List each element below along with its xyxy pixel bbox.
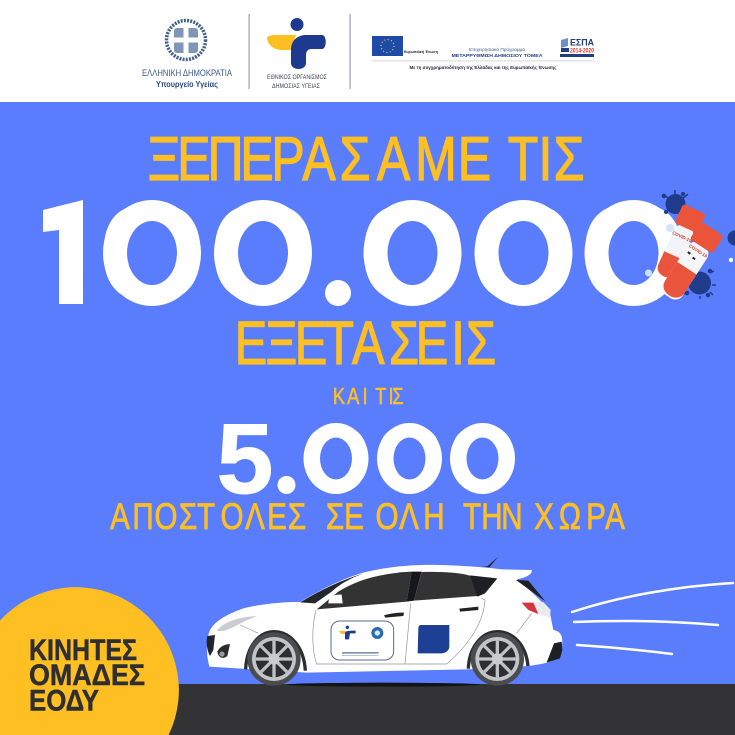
- big number: 5.000: .: [277, 427, 296, 505]
- car: [207, 557, 562, 687]
- badge text: ΟΜΑΔΕΣ: [29, 659, 145, 692]
- big number: 5.000: 0: [299, 407, 373, 510]
- EODY caption: [267, 74, 327, 90]
- virus right, cut off by edge: [728, 230, 735, 246]
- bumpers and fog lamp: [207, 635, 562, 663]
- big number: 100.000: [43, 174, 690, 333]
- big number: 100.000: 0: [207, 174, 319, 331]
- antenna: [482, 557, 498, 567]
- logo: ESPA 2014-2020: 2014-2020: [570, 48, 595, 54]
- illustration: test tubes and viruses: [645, 190, 735, 304]
- heading: ΕΞΕΤΑΣΕΙΣ: ΕΞΕΤΑΣΕΙΣ: [235, 309, 496, 377]
- big number: 5.000: 5: [217, 404, 273, 515]
- test tube back: COVID-19: [671, 230, 693, 244]
- big number: 100.000: 0: [96, 174, 208, 331]
- wheel arches: [246, 632, 528, 671]
- big number: 100.000: 0: [467, 174, 580, 331]
- headlight: [217, 616, 257, 631]
- headline: ΞΕΠΕΡΑΣΑΜΕ ΤΙΣ: ΞΕΠΕΡΑΣΑΜΕ ΤΙΣ: [0, 124, 584, 193]
- logo: EODY mark: [267, 18, 326, 69]
- big number: 100.000: 0: [577, 174, 690, 331]
- badge text: [29, 634, 145, 718]
- EU and programme captions: Με τη συγχρηματοδότηση της Ελλάδας και της Ευρωπαϊκής Ένωσης: [410, 65, 557, 70]
- big number: 100.000: 1: [61, 180, 81, 333]
- ground shadow: [287, 683, 480, 687]
- big number: 100.000: .: [323, 202, 353, 324]
- EU and programme captions: [372, 46, 594, 70]
- EU and programme captions: Επιχειρησιακό Πρόγραμμα: [469, 46, 525, 52]
- pale specks: [645, 224, 733, 276]
- door lines and handles: [240, 598, 532, 664]
- ministry caption: [142, 68, 233, 89]
- door decal: [331, 621, 394, 660]
- big number: 100.000: 0: [356, 174, 469, 331]
- logo: EU flag: [372, 36, 403, 56]
- road: [0, 684, 735, 735]
- badge text: ΚΙΝΗΤΕΣ: [29, 634, 137, 667]
- big number: 5.000: [217, 404, 519, 515]
- small text: ΚΑΙ ΤΙΣ: ΚΑΙ ΤΙΣ: [0, 384, 404, 410]
- speed lines: [572, 583, 733, 654]
- car body: [207, 565, 562, 673]
- ministry caption: ΕΛΛΗΝΙΚΗ ΔΗΜΟΚΡΑΤΙΑ: [142, 68, 233, 78]
- EU and programme captions: Ευρωπαϊκή Ένωση: [404, 50, 439, 54]
- logo: Hellenic Republic emblem: [166, 20, 206, 60]
- virus bottom: [684, 269, 716, 299]
- ministry caption: Υπουργείο Υγείας: [156, 79, 219, 89]
- rear wheel: [471, 632, 524, 686]
- virus top: [662, 190, 688, 214]
- test tube front: COVID-19: [688, 243, 709, 259]
- EODY caption: ΔΗΜΟΣΙΑΣ ΥΓΕΙΑΣ: [272, 83, 320, 90]
- header band with logos: [0, 0, 735, 102]
- badge: yellow circle: [0, 587, 179, 735]
- badge text: ΕΟΔΥ: [29, 684, 99, 718]
- subheading: ΑΠΟΣΤΟΛΕΣ ΣΕ ΟΛΗ ΤΗΝ ΧΩΡΑ: ΑΠΟΣΤΟΛΕΣ ΣΕ ΟΛΗ ΤΗΝ ΧΩΡΑ: [0, 497, 625, 538]
- logo: ESPA 2014-2020: ΕΣΠΑ: [570, 38, 594, 48]
- logo: ESPA 2014-2020: [560, 38, 595, 57]
- EODY caption: ΕΘΝΙΚΟΣ ΟΡΓΑΝΙΣΜΟΣ: [267, 74, 327, 81]
- front wheel: [247, 632, 301, 686]
- windows: [300, 572, 546, 609]
- big number: 5.000: 0: [446, 407, 519, 510]
- blue door panel: [418, 625, 449, 653]
- big number: 5.000: 0: [373, 407, 446, 510]
- EU and programme captions: ΜΕΤΑΡΡΥΘΜΙΣΗ ΔΗΜΟΣΙΟΥ ΤΟΜΕΑ: [452, 53, 543, 59]
- taillight: [522, 602, 551, 617]
